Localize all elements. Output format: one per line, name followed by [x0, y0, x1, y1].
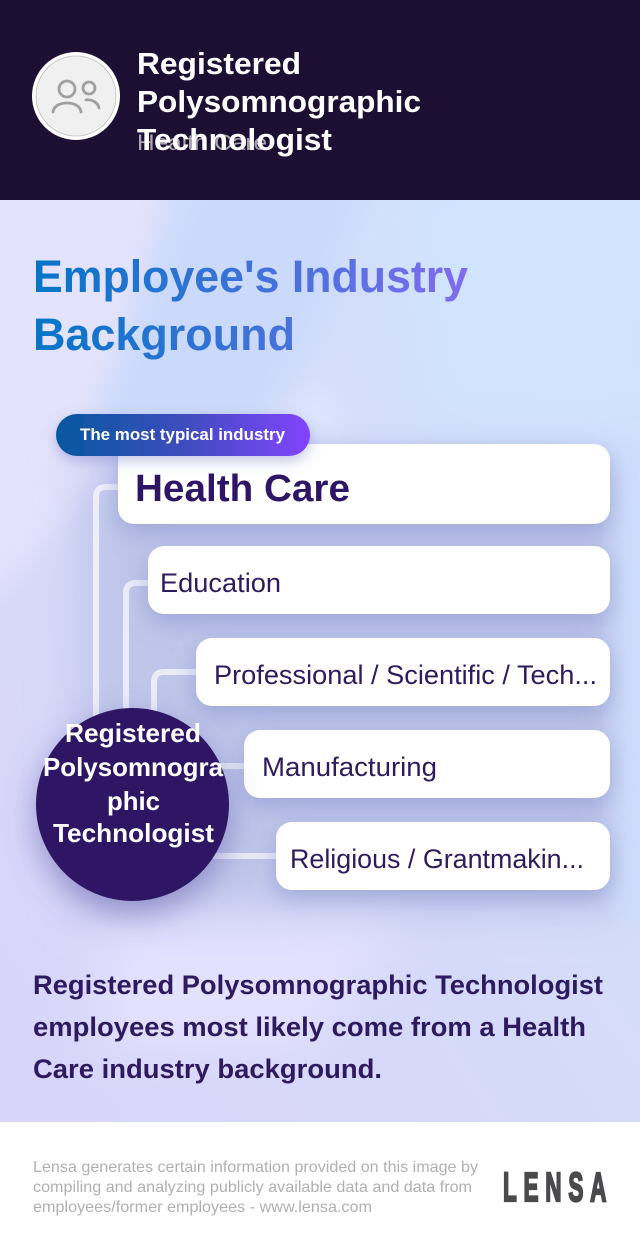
heading: Employee's Industry — [33, 251, 468, 302]
card: Education — [148, 546, 610, 614]
summary text: Care industry background. — [33, 1054, 382, 1084]
heading — [33, 251, 468, 360]
card: Manufacturing — [244, 730, 610, 798]
header job title: Technologist — [137, 122, 332, 157]
badge: most typical industry: The most typical industry — [80, 425, 286, 444]
logo: LENSA: LENSA — [503, 1165, 606, 1211]
background panel — [0, 170, 640, 1122]
icon: avatar with two people — [32, 52, 120, 140]
footer panel — [0, 1122, 640, 1250]
card: Religious — [276, 822, 610, 890]
heading: Background — [33, 309, 295, 360]
central circle: job title: Technologist — [53, 818, 214, 848]
card: Professional: Professional / Scientific / Tech... — [214, 660, 597, 690]
footer disclaimer: Lensa generates certain information provided on this image by — [33, 1159, 478, 1176]
summary text — [33, 970, 603, 1084]
central circle: job title: Polysomnogra — [43, 752, 224, 782]
header job title: Registered — [137, 46, 301, 81]
central circle: job title: phic — [107, 786, 160, 816]
summary text: Registered Polysomnographic Technologist — [33, 970, 603, 1000]
footer disclaimer — [33, 1159, 478, 1216]
summary text: employees most likely come from a Health — [33, 1012, 586, 1042]
card: Education: Education — [160, 568, 281, 598]
badge: most typical industry — [56, 414, 310, 456]
central circle: job title — [36, 708, 229, 901]
header job title — [137, 46, 421, 157]
footer disclaimer: employees/former employees - www.lensa.com — [33, 1199, 372, 1216]
header industry subtitle: Health Care — [137, 130, 267, 155]
card: Religious: Religious / Grantmakin... — [290, 844, 584, 874]
card: Health Care: Health Care — [135, 468, 350, 510]
card: Health Care — [118, 444, 610, 524]
card: Professional — [196, 638, 610, 706]
connector lines — [96, 487, 282, 856]
card: Manufacturing: Manufacturing — [262, 752, 437, 782]
footer disclaimer: compiling and analyzing publicly available data and data from — [33, 1179, 472, 1196]
header job title: Polysomnographic — [137, 84, 421, 119]
central circle: job title: Registered — [65, 718, 201, 748]
header panel — [0, 0, 640, 200]
